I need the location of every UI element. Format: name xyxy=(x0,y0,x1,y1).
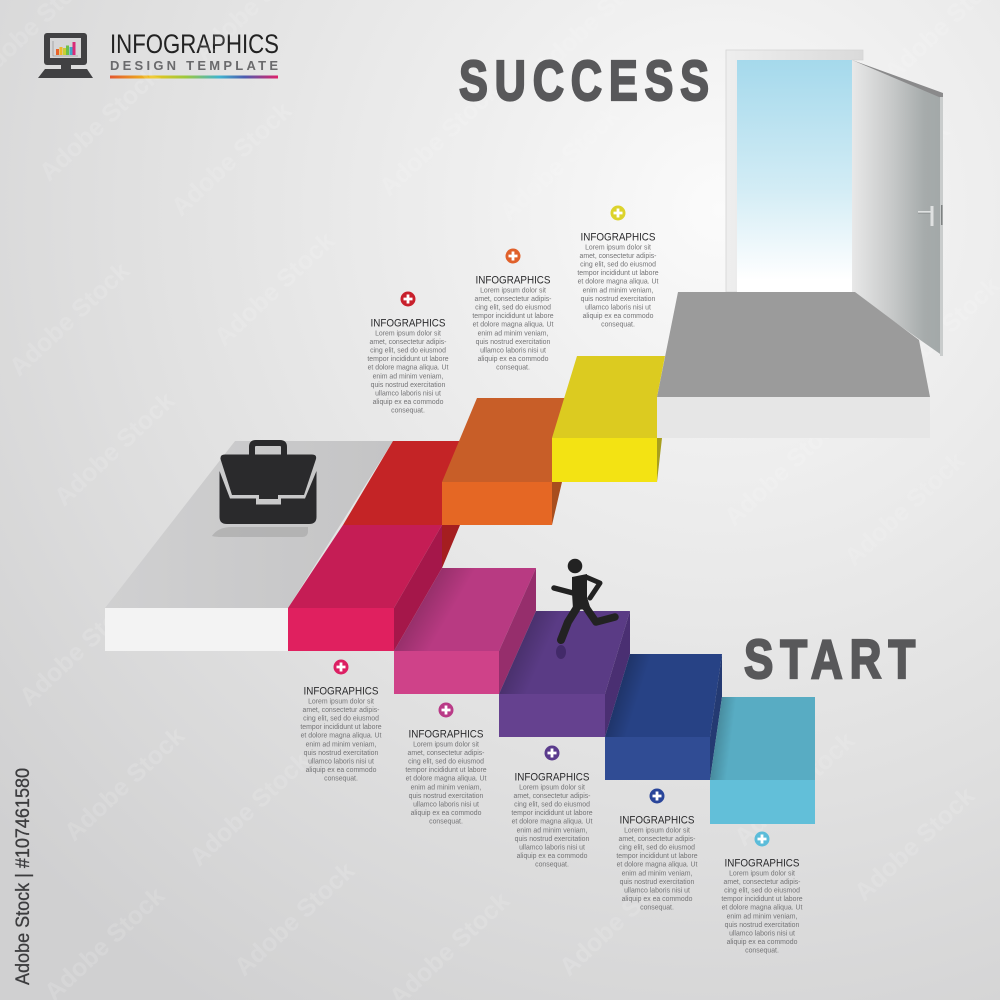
info block: orange xyxy=(472,248,554,372)
block body: tempor incididunt ut labore xyxy=(511,810,593,817)
step: orange xyxy=(442,398,565,525)
info block: purple xyxy=(511,746,593,868)
block body: enim ad minim veniam, xyxy=(622,870,693,877)
logo title: INFOGRAPHICS xyxy=(110,29,279,59)
icon: pink plus xyxy=(334,660,348,674)
icon: cyan plus xyxy=(754,832,770,846)
icon: blue plus xyxy=(650,788,664,804)
block body: aliquip ex ea commodo xyxy=(517,853,588,860)
block body: et dolore magna aliqua. Ut xyxy=(512,819,592,826)
block body: ullamco laboris nisi ut xyxy=(624,887,690,894)
block body: amet, consectetur adipis- xyxy=(475,296,551,303)
block heading: INFOGRAPHICS xyxy=(476,274,550,286)
block body: aliquip ex ea commodo xyxy=(478,356,549,363)
block body: amet, consectetur adipis- xyxy=(370,339,446,346)
step: red xyxy=(343,441,460,568)
step: magenta xyxy=(394,568,536,694)
door xyxy=(726,50,943,356)
heading: SUCCESS: SUCCESS xyxy=(459,48,709,112)
block body: ullamco laboris nisi ut xyxy=(480,347,546,354)
block body: cing elit, sed do eiusmod xyxy=(619,845,695,852)
watermark: Adobe Stock: Adobe Stock xyxy=(59,722,190,846)
block body: et dolore magna aliqua. Ut xyxy=(617,862,697,869)
block body: et dolore magna aliqua. Ut xyxy=(368,365,448,372)
block body: enim ad minim veniam, xyxy=(583,287,654,294)
block body xyxy=(367,330,449,414)
block body: consequat. xyxy=(535,862,569,868)
block body: consequat. xyxy=(745,948,779,954)
step: purple xyxy=(499,611,630,737)
watermark: Adobe Stock: Adobe Stock xyxy=(849,782,980,906)
block body: Lorem ipsum dolor sit xyxy=(519,784,585,792)
block body: Lorem ipsum dolor sit xyxy=(729,870,795,878)
logo xyxy=(38,29,279,78)
block body: Lorem ipsum dolor sit xyxy=(375,330,441,338)
icon: monitor with bar chart xyxy=(38,33,93,78)
block body: ullamco laboris nisi ut xyxy=(308,758,374,765)
block body: consequat. xyxy=(640,904,674,912)
block heading: INFOGRAPHICS xyxy=(408,728,484,740)
watermark: Adobe Stock: Adobe Stock xyxy=(229,857,360,981)
block body: aliquip ex ea commodo xyxy=(306,767,377,774)
block body xyxy=(472,288,554,372)
block body: consequat. xyxy=(601,322,635,328)
block body: quis nostrud exercitation xyxy=(476,339,551,346)
icon: purple plus xyxy=(544,746,560,760)
watermark: Adobe Stock: Adobe Stock xyxy=(729,727,860,851)
block body: amet, consectetur adipis- xyxy=(724,879,800,886)
block body: Lorem ipsum dolor sit xyxy=(308,698,374,706)
block body: quis nostrud exercitation xyxy=(725,922,800,929)
block body: Lorem ipsum dolor sit xyxy=(480,288,546,294)
info block: magenta xyxy=(405,702,487,826)
ledge front xyxy=(105,608,289,651)
block body: et dolore magna aliqua. Ut xyxy=(722,905,802,912)
block body: ullamco laboris nisi ut xyxy=(519,844,585,851)
watermark: Adobe Stock: Adobe Stock xyxy=(166,97,297,221)
block body: Lorem ipsum dolor sit xyxy=(624,828,690,834)
logo subtitle: DESIGN TEMPLATE xyxy=(110,58,278,73)
doorway sky xyxy=(737,60,852,292)
watermark: Adobe Stock: Adobe Stock xyxy=(14,587,145,711)
landing top xyxy=(657,292,930,397)
platform: success landing xyxy=(657,292,930,438)
block body: amet, consectetur adipis- xyxy=(514,793,590,800)
watermark: Adobe Stock: Adobe Stock xyxy=(719,407,850,531)
watermark: Adobe Stock: Adobe Stock xyxy=(49,387,180,511)
stock credit: Adobe Stock | #107461580 xyxy=(13,768,34,985)
open door panel xyxy=(852,60,943,356)
watermark: Adobe Stock: Adobe Stock xyxy=(209,227,340,351)
block body: amet, consectetur adipis- xyxy=(408,750,484,757)
watermark: Adobe Stock: Adobe Stock xyxy=(374,77,505,201)
watermark: Adobe Stock: Adobe Stock xyxy=(34,62,165,186)
block body: amet, consectetur adipis- xyxy=(303,707,379,714)
block body: et dolore magna aliqua. Ut xyxy=(406,776,486,783)
block body: ullamco laboris nisi ut xyxy=(729,930,795,937)
platform: briefcase ledge xyxy=(105,441,393,651)
watermark: Adobe Stock: Adobe Stock xyxy=(4,257,135,381)
block body: ullamco laboris nisi ut xyxy=(413,801,479,808)
info block: cyan xyxy=(721,832,803,954)
block body xyxy=(511,784,593,868)
block body xyxy=(577,244,659,328)
block body: et dolore magna aliqua. Ut xyxy=(578,279,658,286)
block body: quis nostrud exercitation xyxy=(409,793,484,800)
block body: et dolore magna aliqua. Ut xyxy=(301,733,381,740)
info block: blue xyxy=(616,788,698,912)
block body: enim ad minim veniam, xyxy=(478,330,549,337)
block heading: INFOGRAPHICS xyxy=(304,686,378,698)
block body: cing elit, sed do eiusmod xyxy=(580,262,656,269)
block body: amet, consectetur adipis- xyxy=(580,253,656,260)
block body: et dolore magna aliqua. Ut xyxy=(473,322,553,329)
block body: cing elit, sed do eiusmod xyxy=(370,348,446,355)
block body: enim ad minim veniam, xyxy=(411,784,482,791)
watermark: Adobe Stock: Adobe Stock xyxy=(839,447,970,571)
block body xyxy=(616,828,698,912)
block body: tempor incididunt ut labore xyxy=(721,896,803,903)
watermark: Adobe Stock: Adobe Stock xyxy=(184,747,315,871)
block body: enim ad minim veniam, xyxy=(727,913,798,920)
step: pink xyxy=(288,525,442,651)
block body: tempor incididunt ut labore xyxy=(405,767,487,774)
block body: quis nostrud exercitation xyxy=(620,879,695,886)
watermark: Adobe Stock: Adobe Stock xyxy=(554,857,685,981)
block heading: INFOGRAPHICS xyxy=(620,814,694,826)
landing front xyxy=(657,397,930,438)
block body: tempor incididunt ut labore xyxy=(300,724,382,731)
block body: enim ad minim veniam, xyxy=(306,741,377,748)
block body xyxy=(300,698,382,782)
block body: aliquip ex ea commodo xyxy=(583,313,654,320)
block body: aliquip ex ea commodo xyxy=(727,939,798,946)
block heading: INFOGRAPHICS xyxy=(724,858,800,870)
block body: quis nostrud exercitation xyxy=(581,296,656,303)
icon: running figure xyxy=(554,559,615,659)
block body: quis nostrud exercitation xyxy=(371,382,446,389)
block body: ullamco laboris nisi ut xyxy=(375,390,441,397)
block body: aliquip ex ea commodo xyxy=(373,399,444,406)
block body: enim ad minim veniam, xyxy=(517,827,588,834)
icon: briefcase xyxy=(212,440,316,537)
block body: aliquip ex ea commodo xyxy=(411,810,482,817)
block body: Lorem ipsum dolor sit xyxy=(585,244,651,252)
block body: ullamco laboris nisi ut xyxy=(585,304,651,311)
block heading: INFOGRAPHICS xyxy=(370,318,446,330)
watermark: Adobe Stock: Adobe Stock xyxy=(824,117,955,241)
block body: consequat. xyxy=(391,408,425,414)
block body xyxy=(721,870,803,954)
block body: tempor incididunt ut labore xyxy=(616,853,698,860)
block body: cing elit, sed do eiusmod xyxy=(514,802,590,809)
step: cyan xyxy=(710,697,815,824)
block body: quis nostrud exercitation xyxy=(515,836,590,843)
block body: quis nostrud exercitation xyxy=(304,750,379,757)
door side edge xyxy=(940,97,943,356)
block body xyxy=(405,742,487,826)
info block: red xyxy=(367,292,449,414)
block heading: INFOGRAPHICS xyxy=(514,772,590,784)
block body: tempor incididunt ut labore xyxy=(367,356,449,363)
heading: START: START xyxy=(744,628,915,690)
block heading: INFOGRAPHICS xyxy=(580,232,656,244)
step: yellow xyxy=(552,356,665,482)
step: blue xyxy=(605,654,722,780)
block body: tempor incididunt ut labore xyxy=(472,313,554,320)
block body: enim ad minim veniam, xyxy=(373,373,444,380)
block body: tempor incididunt ut labore xyxy=(577,270,659,277)
block body: consequat. xyxy=(496,364,530,372)
ledge top xyxy=(105,441,393,608)
door handle xyxy=(918,205,942,226)
info block: pink xyxy=(300,660,382,782)
watermark: Adobe Stock: Adobe Stock xyxy=(494,102,625,226)
icon: magenta plus xyxy=(438,702,454,718)
block body: cing elit, sed do eiusmod xyxy=(724,888,800,895)
door top edge xyxy=(852,60,943,98)
rainbow rule xyxy=(110,76,278,78)
block body: consequat. xyxy=(324,776,358,782)
block body: cing elit, sed do eiusmod xyxy=(408,759,484,766)
block body: cing elit, sed do eiusmod xyxy=(475,305,551,312)
block body: aliquip ex ea commodo xyxy=(622,896,693,903)
block body: cing elit, sed do eiusmod xyxy=(303,716,379,723)
icon: red plus xyxy=(400,292,416,306)
door frame xyxy=(726,50,863,292)
watermark: Adobe Stock: Adobe Stock xyxy=(704,72,835,196)
block body: consequat. xyxy=(429,818,463,826)
block body: amet, consectetur adipis- xyxy=(619,836,695,843)
block body: Lorem ipsum dolor sit xyxy=(413,742,479,748)
info block: yellow xyxy=(577,206,659,328)
icon: yellow plus xyxy=(610,206,626,220)
icon: orange plus xyxy=(506,248,520,264)
